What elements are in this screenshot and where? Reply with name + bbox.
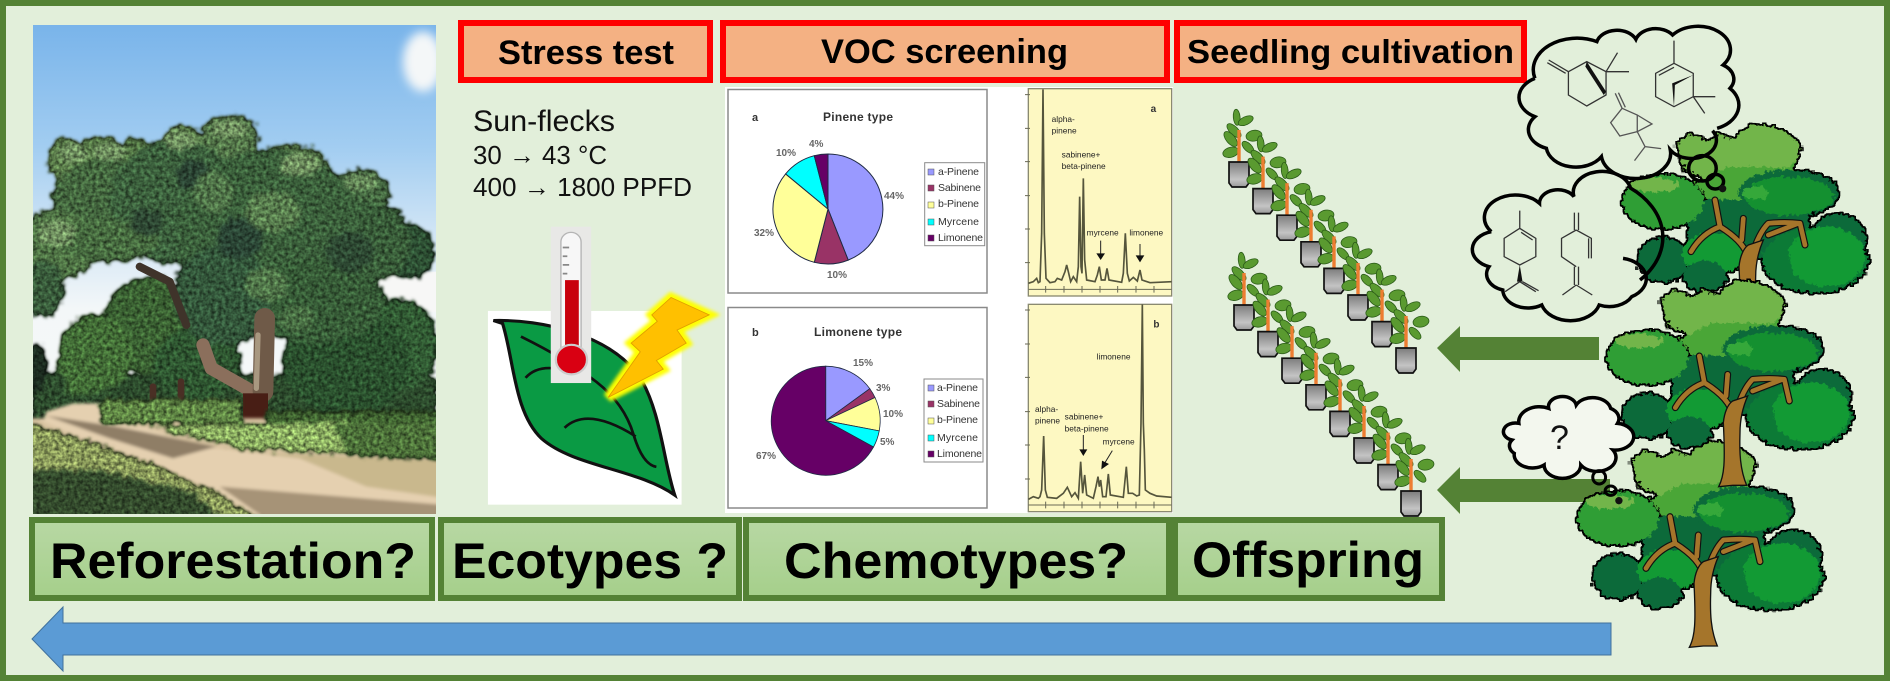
header: VOC screening bbox=[723, 23, 1167, 80]
label: Ecotypes ? bbox=[441, 520, 739, 598]
thought cloud: limonene and myrcene bbox=[1472, 171, 1663, 321]
label: Reforestation? bbox=[32, 520, 432, 598]
label: Offspring: Offspring bbox=[1192, 532, 1424, 588]
arrow: tree to upper seedlings bbox=[1437, 326, 1599, 372]
stress test conditions text: Sun-flecks bbox=[473, 105, 615, 138]
trunk and branches bbox=[140, 267, 265, 410]
seedlings: upper row bbox=[1221, 109, 1430, 373]
thought cloud: pinene structures bbox=[1519, 26, 1739, 192]
pie chart a: Pinene type: Limonene bbox=[938, 232, 983, 244]
pie chart b: Limonene type: Limonene type bbox=[814, 325, 902, 339]
chromatogram a: limonene bbox=[1129, 228, 1163, 238]
stress test conditions text: 30 → 43 °C bbox=[473, 140, 607, 170]
pie chart b: Limonene type: 5% bbox=[880, 437, 895, 448]
thermometer bbox=[551, 227, 591, 383]
seedlings: lower row bbox=[1226, 252, 1435, 516]
chromatogram b: beta-pinene bbox=[1065, 423, 1109, 433]
pie chart b: Limonene type: 15% bbox=[853, 358, 873, 369]
molecule structures bbox=[1547, 41, 1715, 161]
stress test conditions text: 400 → 1800 PPFD bbox=[473, 172, 692, 202]
pie chart b: Limonene type bbox=[728, 308, 987, 508]
pie chart a: Pinene type: Sabinene bbox=[938, 182, 981, 194]
pie chart b: Limonene type: b-Pinene bbox=[937, 414, 978, 426]
header: VOC screening: VOC screening bbox=[821, 33, 1068, 71]
pie chart a: Pinene type: Myrcene bbox=[938, 216, 979, 228]
icon: leaf with thermometer and lightning bbox=[488, 227, 709, 505]
pie chart a: Pinene type: b-Pinene bbox=[938, 198, 979, 210]
arrow: tree to lower seedlings bbox=[1437, 467, 1610, 514]
pie chart b: Limonene type: Myrcene bbox=[937, 432, 978, 444]
chromatogram b: limonene bbox=[1097, 351, 1131, 361]
chromatogram a: myrcene bbox=[1087, 228, 1119, 238]
chromatogram b: sabinene+ bbox=[1065, 411, 1103, 421]
pie chart a: Pinene type: 10% bbox=[827, 270, 847, 281]
stress test conditions text bbox=[473, 105, 692, 202]
chromatogram a: sabinene+ bbox=[1062, 149, 1100, 159]
thought cloud: question mark: ? bbox=[1550, 419, 1569, 457]
pie chart b: Limonene type: 67% bbox=[756, 451, 776, 462]
pie chart a: Pinene type: Pinene type bbox=[823, 110, 893, 124]
label: Chemotypes?: Chemotypes? bbox=[784, 533, 1128, 589]
chromatogram b: alpha- bbox=[1035, 404, 1058, 414]
chromatogram b bbox=[1025, 304, 1172, 512]
header: Stress test bbox=[461, 23, 710, 80]
foliage masses bbox=[18, 115, 438, 422]
photo: cork oak on a dirt road bbox=[18, 25, 446, 522]
pie chart b: Limonene type: a-Pinene bbox=[937, 382, 978, 394]
pie chart a: Pinene type: a bbox=[752, 112, 759, 124]
label: Offspring bbox=[1175, 520, 1442, 598]
pie chart b: Limonene type: b bbox=[752, 327, 759, 339]
icon: cork oak illustration bbox=[1578, 123, 1868, 647]
lightning bolt bbox=[608, 297, 709, 397]
pie chart b: Limonene type: 3% bbox=[876, 383, 891, 394]
leaf bbox=[493, 320, 675, 495]
label: Reforestation?: Reforestation? bbox=[50, 533, 416, 589]
pie chart a: Pinene type: 10% bbox=[776, 148, 796, 159]
pie chart a: Pinene type: 32% bbox=[754, 228, 774, 239]
pie chart b: Limonene type: 10% bbox=[883, 409, 903, 420]
label: Ecotypes ?: Ecotypes ? bbox=[452, 533, 728, 589]
chromatogram a: a bbox=[1151, 104, 1157, 115]
thought cloud: question mark bbox=[1503, 397, 1634, 504]
chromatogram b: pinene bbox=[1035, 416, 1060, 426]
header: Seedling cultivation: Seedling cultivation bbox=[1187, 33, 1514, 70]
pie chart a: Pinene type: a-Pinene bbox=[938, 166, 979, 178]
chromatogram b: myrcene bbox=[1103, 436, 1135, 446]
label: Chemotypes? bbox=[746, 520, 1169, 598]
chromatogram a: alpha- bbox=[1052, 114, 1075, 124]
pie chart b: Limonene type: Sabinene bbox=[937, 398, 980, 410]
ground bbox=[26, 403, 446, 522]
pie chart a: Pinene type: 4% bbox=[809, 139, 824, 150]
white panel behind VOC results bbox=[725, 87, 1173, 513]
pie chart a: Pinene type: 44% bbox=[884, 191, 904, 202]
header: Stress test: Stress test bbox=[498, 34, 674, 72]
pie chart a: Pinene type bbox=[728, 90, 987, 293]
arrow: timeline pointing left bbox=[32, 607, 1611, 671]
header: Seedling cultivation bbox=[1177, 23, 1524, 80]
leaf clusters: highlights and shadow bbox=[176, 160, 210, 190]
pie chart b: Limonene type: Limonene bbox=[937, 448, 982, 460]
chromatogram a: beta-pinene bbox=[1062, 161, 1106, 171]
chromatogram a bbox=[1025, 89, 1172, 296]
chromatogram a: pinene bbox=[1052, 126, 1077, 136]
chromatogram b: b bbox=[1153, 319, 1159, 330]
